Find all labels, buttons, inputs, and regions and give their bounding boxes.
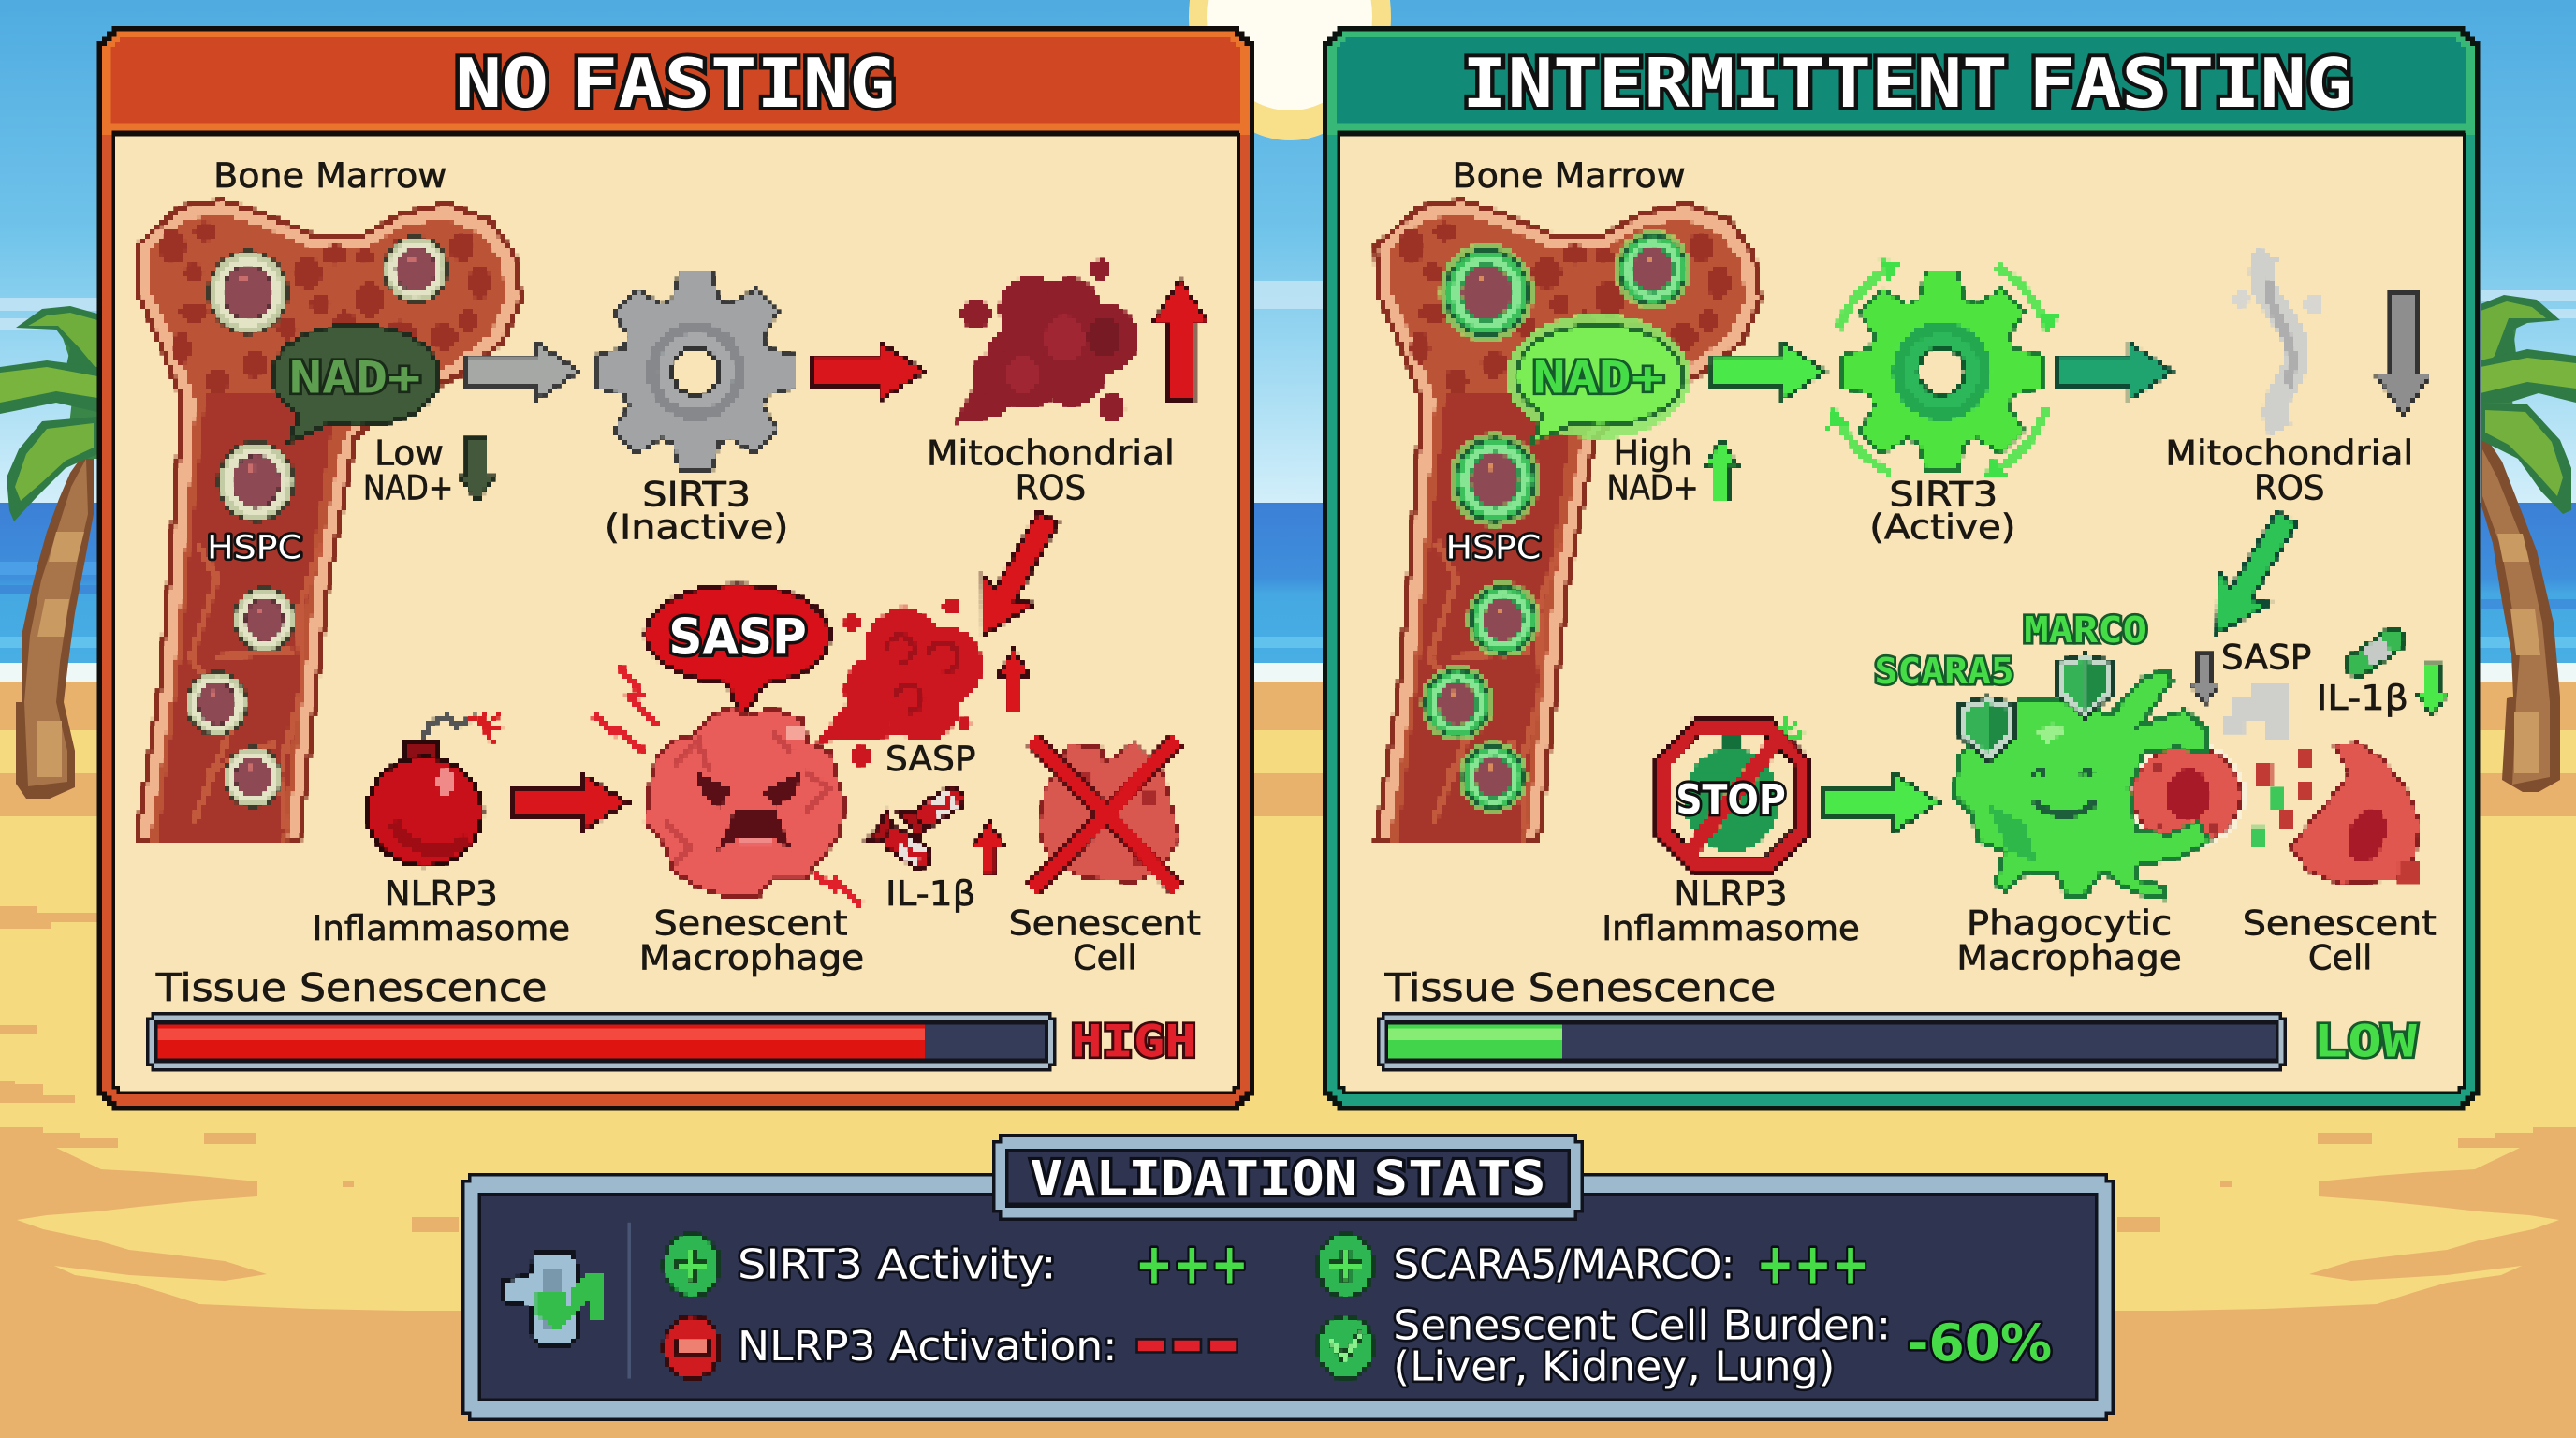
arrow: NLRP3 to senescent macrophage (513, 774, 627, 831)
label: Senescent: Senescent (654, 903, 848, 944)
arrow: SIRT3 to ROS reduced (2056, 344, 2172, 399)
stats title: VALIDATION (1030, 1152, 1357, 1207)
label: SASP: SASP (2221, 637, 2311, 677)
pathway artwork: no fasting (137, 200, 1208, 905)
panel: validation stats (461, 1134, 2115, 1421)
icon: small green capsule (2342, 624, 2409, 681)
panel frame: intermittent fasting (1323, 26, 2480, 1110)
stats icons (503, 1234, 1373, 1379)
icon: IL-1 beta missiles (866, 778, 972, 878)
label: Mitochondrial: Mitochondrial (927, 433, 1175, 474)
icon: angry senescent macrophage (646, 707, 846, 896)
tissue senescence bar: low (1377, 1012, 2287, 1071)
stat: SIRT3 Activity: SIRT3 Activity: (738, 1240, 1057, 1288)
panel title: intermittent fasting: FASTING (2029, 44, 2352, 123)
stat value: minus minus minus (1137, 1339, 1237, 1352)
stat value: minus 60 percent: -60% (1908, 1313, 2052, 1372)
icon: minus badge NLRP3 (664, 1316, 720, 1379)
icon: plus badge SCARA5/MARCO (1318, 1234, 1373, 1297)
label: NAD+ bubble: NAD+ (1533, 352, 1664, 404)
label: Active: (Active) (1869, 507, 2016, 548)
label: Low: Low (374, 433, 444, 474)
icon: low NAD+ bubble (272, 326, 439, 442)
arrow: SIRT3 to ROS (812, 344, 925, 399)
icon: bone marrow with glowing HSPC cells (1376, 200, 1761, 842)
panel title: no fasting: NO (455, 44, 549, 123)
label: SCARA5: SCARA5 (1875, 651, 2014, 693)
panel title: intermittent fasting (1462, 44, 2352, 123)
label: IL-1 beta: IL-1β (886, 873, 976, 914)
label: NAD+: NAD+ (363, 468, 453, 508)
stats title: STATS (1373, 1152, 1546, 1207)
arrow: NAD+ to SIRT3 (466, 344, 578, 399)
label: NLRP3: NLRP3 (1674, 873, 1788, 914)
palm tree left (0, 306, 97, 799)
label: ROS: ROS (1016, 468, 1086, 508)
label: SIRT3: SIRT3 (1889, 475, 1998, 515)
arrow: SASP reduced (2190, 654, 2219, 705)
label: Senescent: Senescent (2243, 903, 2437, 944)
icon: lightning bolts (593, 666, 862, 905)
label: HSPC: HSPC (207, 529, 302, 567)
label: Inactive: (Inactive) (605, 507, 788, 548)
icon: senescent cell crossed out (1033, 740, 1179, 889)
label: Inflammasome: Inflammasome (312, 908, 570, 948)
icon: plus badge SIRT3 (664, 1234, 720, 1297)
arrow: high NAD up (1705, 439, 1738, 501)
label: Tissue Senescence: Tissue Senescence (1383, 965, 1776, 1010)
icon: gray SASP smoke (2224, 683, 2291, 738)
tissue senescence bar: high (146, 1012, 1057, 1071)
icon: high NAD+ bubble (1506, 314, 1690, 442)
icon: check badge burden (1318, 1316, 1373, 1379)
arrow: ROS to SASP reduced (2192, 503, 2312, 648)
label: Phagocytic: Phagocytic (1967, 903, 2172, 944)
icon: active SIRT3 gear with rotation arrows (1827, 259, 2060, 477)
label: Bone Marrow: Bone Marrow (1453, 155, 1686, 196)
pathway artwork: intermittent fasting (1376, 200, 2448, 899)
icon: stopped NLRP3 inflammasome (1656, 716, 1808, 873)
label: NLRP3: NLRP3 (385, 873, 498, 914)
arrow: low NAD down (460, 439, 494, 501)
label: SIRT3: SIRT3 (642, 475, 751, 515)
label: IL-1 beta: IL-1β (2317, 678, 2408, 718)
label: Macrophage: Macrophage (639, 938, 864, 978)
label: Tissue Senescence: Tissue Senescence (155, 965, 547, 1010)
label: Inflammasome: Inflammasome (1602, 908, 1860, 948)
icon: phagocytic macrophage (1954, 670, 2210, 899)
stat: Senescent Cell Burden: Senescent Cell Burden: (1393, 1301, 1891, 1349)
label: NAD+: NAD+ (1606, 468, 1699, 508)
icon: NLRP3 bomb (367, 710, 503, 866)
icon: bone marrow with HSPC cells (137, 200, 520, 842)
stats frame (461, 1173, 2115, 1421)
stat: SCARA5/MARCO: SCARA5/MARCO: (1393, 1240, 1734, 1288)
panel title: intermittent fasting: INTERMITTENT (1462, 44, 2008, 123)
icon: SASP red cloud (816, 598, 983, 766)
bar level: LOW: LOW (2313, 1017, 2417, 1068)
icon: mitochondrial ROS cloud (955, 259, 1138, 424)
label: SASP: SASP (886, 739, 976, 779)
label: High: High (1614, 433, 1692, 474)
icon: validation tool (503, 1252, 605, 1345)
label: HSPC: HSPC (1445, 529, 1541, 567)
stat: organs: (Liver, Kidney, Lung) (1393, 1343, 1835, 1390)
icon: engulfed senescent cell (2128, 741, 2246, 849)
arrow: SASP increased (997, 649, 1030, 712)
arrow: stopped NLRP3 to phagocytic macrophage (1823, 774, 1939, 831)
label: NAD+ bubble: NAD+ (289, 352, 420, 404)
icon: inactive SIRT3 gear (597, 272, 795, 470)
icon: broken senescent cell (2250, 742, 2420, 884)
stat value: plus plus plus: +++ (1756, 1233, 1869, 1298)
arrow: IL-1 beta reduced (2417, 664, 2448, 716)
arrow: ROS to SASP (957, 504, 1074, 650)
label: Senescent: Senescent (1009, 903, 1201, 944)
palm tree right (2481, 295, 2576, 792)
label: Cell: Cell (2308, 938, 2372, 978)
label: ROS: ROS (2254, 468, 2324, 508)
label: MARCO: MARCO (2024, 609, 2147, 652)
panel title: no fasting: FASTING (572, 44, 896, 123)
bar level: HIGH: HIGH (1071, 1017, 1196, 1068)
stats title (1030, 1152, 1546, 1207)
panel title: no fasting (455, 44, 896, 123)
panel frame: no fasting (97, 26, 1254, 1110)
icon: faded ROS smoke (2232, 253, 2323, 431)
icon: SCARA5 shield (1960, 697, 2016, 762)
arrow: ROS increased (1153, 279, 1208, 401)
stat value: plus plus plus: +++ (1135, 1233, 1249, 1298)
panel: intermittent fasting (1323, 26, 2480, 1110)
icon: MARCO shield (2056, 654, 2113, 720)
label: Cell: Cell (1073, 938, 1137, 978)
icon: SASP speech bubble (646, 585, 829, 718)
panel: no fasting (97, 26, 1254, 1110)
arrow: IL-1 beta increased (973, 822, 1005, 874)
stats title plate (992, 1134, 1584, 1221)
arrow: NAD+ to SIRT3 active (1712, 344, 1825, 399)
label: Mitochondrial: Mitochondrial (2165, 433, 2413, 474)
stat: NLRP3 Activation: NLRP3 Activation: (738, 1323, 1117, 1371)
label: Bone Marrow: Bone Marrow (213, 155, 446, 196)
label: SASP bubble: SASP (668, 609, 807, 667)
label: Macrophage: Macrophage (1956, 938, 2182, 978)
divider (627, 1223, 631, 1379)
arrow: ROS reduced (2376, 292, 2430, 416)
label: STOP: STOP (1676, 776, 1786, 824)
